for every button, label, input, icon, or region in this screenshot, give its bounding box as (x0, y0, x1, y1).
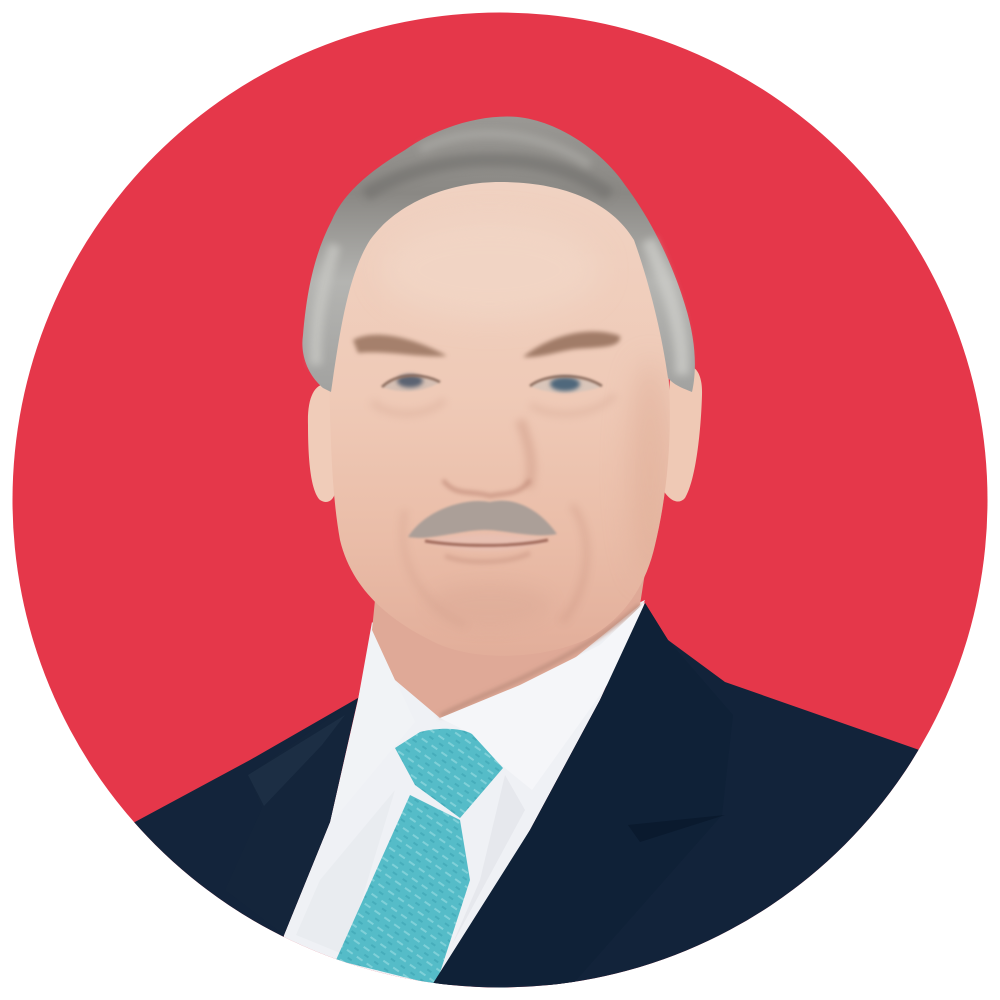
right ear (660, 366, 702, 502)
shirt (280, 600, 645, 1000)
nose (443, 420, 531, 496)
moustache (408, 501, 557, 538)
left eyebrow (353, 335, 447, 356)
mouth (425, 534, 548, 562)
left eye (382, 374, 440, 391)
right collar (440, 602, 645, 720)
right eye (530, 376, 602, 393)
left ear (308, 384, 336, 502)
right eyebrow (523, 332, 620, 357)
collar shadow on neck (440, 605, 640, 716)
face shading (372, 220, 670, 627)
hair (302, 117, 695, 392)
neck (372, 577, 644, 718)
tie (336, 729, 503, 985)
jacket lapels (225, 603, 733, 985)
hair streaks (365, 160, 610, 195)
face (328, 180, 670, 656)
suit jacket (120, 603, 930, 1000)
person (134, 577, 919, 988)
